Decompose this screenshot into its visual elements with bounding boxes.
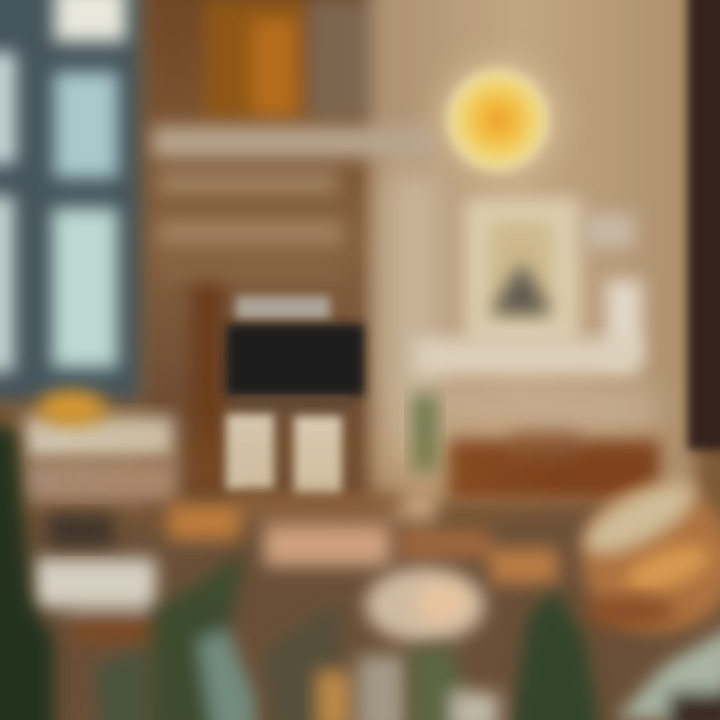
picture inner [490, 222, 552, 317]
left counter [22, 390, 178, 504]
brown sideboard [448, 432, 660, 502]
shelves [152, 126, 437, 276]
orange fruit bowl [38, 390, 106, 426]
window [0, 0, 140, 400]
counter top [24, 416, 174, 460]
lower right cloth [615, 625, 720, 720]
soft warm overlay [70, 430, 530, 510]
machine base [232, 398, 352, 412]
picture frame [464, 198, 580, 344]
coffee machine [226, 296, 364, 412]
dark item left [48, 514, 114, 546]
plants [0, 420, 602, 720]
centre white dish [365, 567, 485, 643]
picture mountain [490, 262, 552, 314]
wall: dark right edge [688, 0, 720, 450]
cushion shadow [584, 596, 676, 628]
lamp disc [446, 68, 550, 172]
plant left [0, 420, 54, 720]
white console top [414, 338, 638, 376]
wall lamp [436, 58, 560, 182]
table surface [168, 490, 558, 584]
plant stem [412, 395, 438, 471]
lower wall panel [440, 388, 655, 428]
plant centre [265, 600, 406, 720]
plant right [410, 590, 602, 720]
lower floor base [0, 515, 720, 720]
counter front [22, 460, 178, 504]
right cushion [574, 468, 720, 632]
machine top [236, 296, 330, 320]
pale wall column [385, 170, 445, 470]
wall: wood panelling [145, 0, 370, 510]
wall: beige right wall [345, 0, 695, 500]
framed picture [464, 198, 580, 344]
window frame [0, 0, 140, 400]
white cabinets [226, 414, 342, 496]
cushion highlight cream [574, 468, 706, 568]
side frames [584, 214, 642, 364]
cushion highlight orange [620, 536, 716, 600]
plant centre left [96, 550, 256, 720]
cushion body [582, 488, 720, 632]
white plate left [34, 558, 178, 644]
window panes [0, 0, 126, 372]
lamp glow [436, 58, 560, 182]
machine body [226, 324, 364, 396]
